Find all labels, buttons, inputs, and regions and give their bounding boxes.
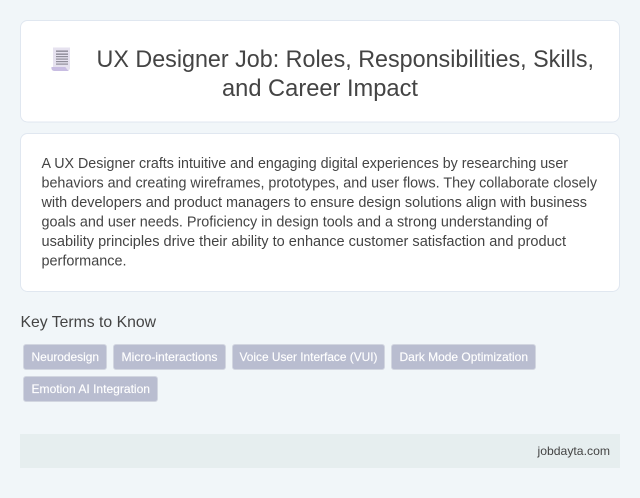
description text: usability principles drive their ability to enhance customer satisfaction and product [42, 234, 566, 250]
title: UX Designer Job: Roles, Responsibilities, Skills, [96, 46, 594, 73]
tag: Neurodesign [24, 344, 106, 370]
description text: with developers and product managers to ensure design solutions align with business [40, 195, 587, 211]
footer source text: jobdayta.com [536, 444, 610, 458]
description text [40, 156, 598, 270]
tag: Dark Mode Optimization [392, 344, 536, 370]
tag: Neurodesign: Neurodesign [32, 350, 99, 364]
description text: behaviors and creating wireframes, prototypes, and user flows. They collaborate closely [42, 176, 598, 192]
icon: document scroll [51, 48, 70, 71]
panel: title card [20, 20, 620, 122]
description text: performance. [42, 254, 126, 270]
panel: description card [20, 134, 620, 292]
heading: key terms: Key Terms to Know [20, 314, 156, 331]
tag: Emotion AI Integration: Emotion AI Integration [32, 382, 150, 396]
tags [24, 344, 536, 402]
tag: Micro-interactions [114, 344, 226, 370]
footer bar [20, 434, 620, 468]
title [96, 46, 594, 102]
title: and Career Impact [222, 75, 418, 102]
tag: Voice User Interface [232, 344, 384, 370]
description text: goals and user needs. Proficiency in design tools and a strong understanding of [42, 214, 549, 230]
tag: Dark Mode Optimization: Dark Mode Optimization [400, 350, 528, 364]
tag: Micro-interactions: Micro-interactions [122, 350, 218, 364]
tag: Emotion AI Integration [24, 376, 158, 402]
tag: Voice User Interface: Voice User Interface (VUI) [240, 350, 378, 364]
description text: A UX Designer crafts intuitive and engaging digital experiences by researching user [42, 156, 568, 172]
